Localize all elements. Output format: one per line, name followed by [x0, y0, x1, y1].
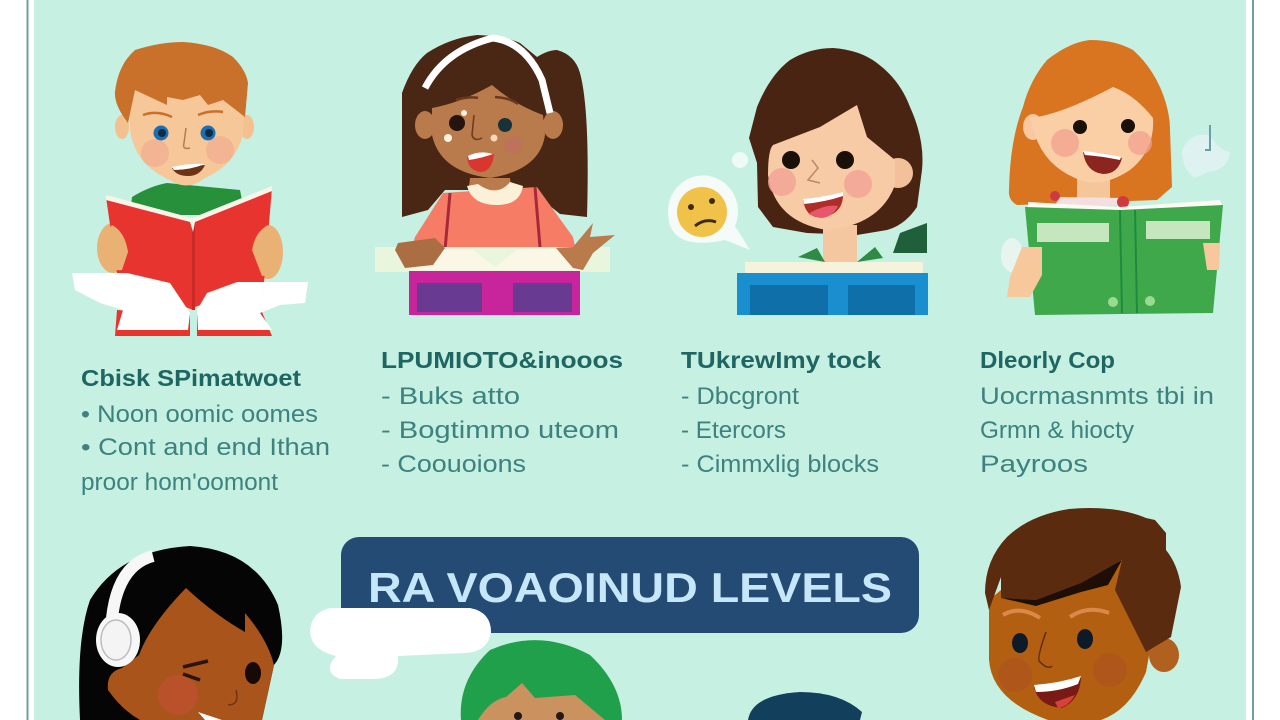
icon: thought doodle — [1182, 125, 1230, 178]
character: girl with green book — [1001, 40, 1230, 315]
heading: column 2: LPUMIOTO&inooos — [381, 347, 623, 373]
text block: column 4: Grmn & hiocty — [980, 417, 1135, 444]
text block: column 4: Payroos — [980, 451, 1088, 478]
text block: column 4: Uocrmasnmts tbi in — [980, 383, 1214, 410]
text block: column 2: - Coouoions — [381, 451, 526, 478]
text block: column 3 — [681, 347, 881, 478]
speech bubble: blank white cloud — [310, 608, 491, 679]
text block: column 2 — [381, 347, 623, 478]
text block: column 1: • Cont and end Ithan — [81, 434, 330, 461]
banner: vocabulary levels title: RA VOAOINUD LEVELS — [368, 564, 892, 611]
character: girl with blue book and emoji bubble — [668, 48, 928, 315]
character: kid with green hair — [461, 640, 622, 720]
text block: column 3: - Dbcgront — [681, 383, 799, 410]
icon: emoji speech bubble — [668, 152, 750, 250]
text block: column 2: - Bogtimmo uteom — [381, 417, 619, 444]
character: kid with dark blue hair — [748, 692, 862, 720]
text block: column 3: - Etercors — [681, 417, 786, 444]
heading: column 1: Cbisk SPimatwoet — [81, 365, 301, 391]
banner: vocabulary levels title — [341, 537, 919, 633]
text block: column 1 — [81, 365, 330, 496]
heading: column 3: TUkrewImy tock — [681, 347, 881, 373]
character: girl with headphones — [79, 546, 282, 720]
character: boy with brown hair — [985, 508, 1181, 720]
heading: column 4: Dleorly Cop — [980, 347, 1115, 373]
text block: column 1: • Noon oomic oomes — [81, 401, 318, 428]
character: girl with headband and purple book — [375, 35, 615, 315]
character: boy with red book — [72, 42, 308, 336]
text block: column 4 — [980, 347, 1214, 478]
text block: column 1: proor hom'oomont — [81, 469, 278, 496]
text block: column 2: - Buks atto — [381, 383, 520, 410]
text block: column 3: - Cimmxlig blocks — [681, 451, 879, 478]
icon: headphones — [96, 556, 153, 667]
